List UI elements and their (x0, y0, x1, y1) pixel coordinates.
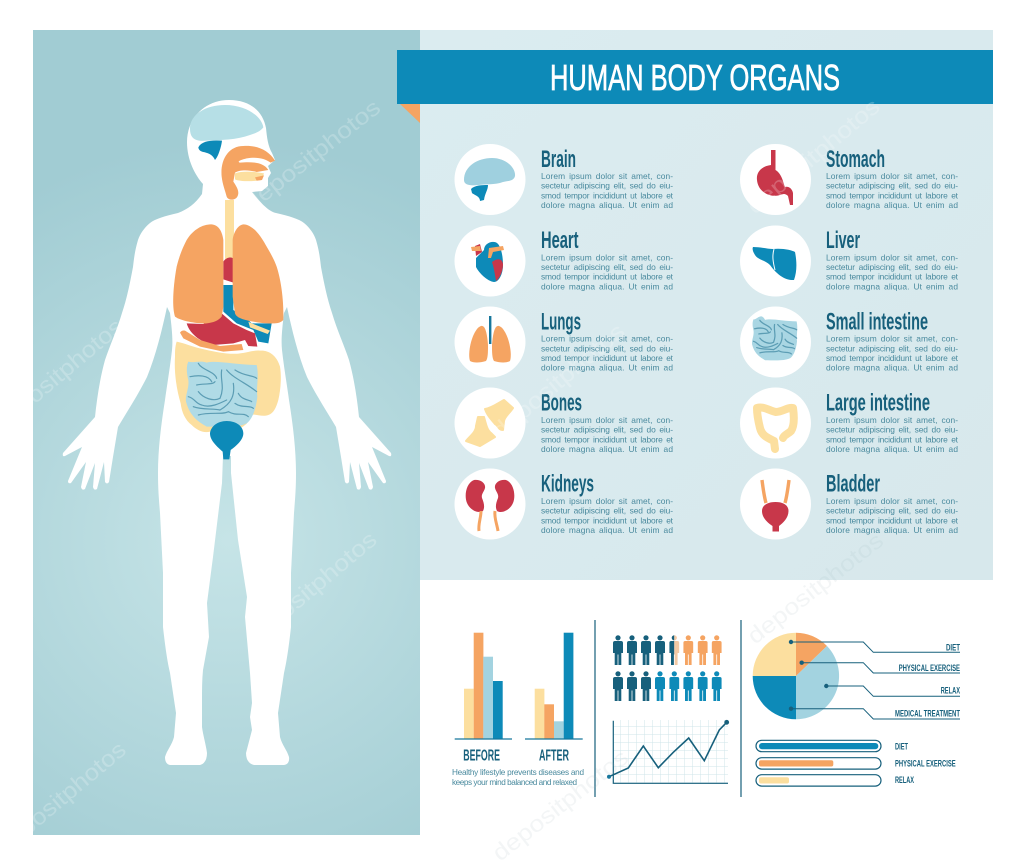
text: Liver description (826, 252, 959, 291)
text: Bladder description: sectetur adipiscing elit, sed do eiu- (826, 506, 958, 516)
pie leader: diet: DIET (946, 642, 960, 653)
text: Brain description (541, 171, 674, 210)
heading: Brain: Brain (541, 146, 576, 173)
text: Bones description: sectetur adipiscing elit, sed do eiu- (541, 425, 673, 435)
pie leader: physical exercise: PHYSICAL EXERCISE (899, 663, 960, 674)
text: Stomach description: smod tempor incididunt ut labore et (826, 190, 959, 200)
watermark (0, 93, 888, 865)
text: Stomach description (826, 171, 959, 210)
organ entry: brain (454, 144, 674, 215)
organ entry: liver (740, 226, 959, 296)
text: Liver description: sectetur adipiscing elit, sed do eiu- (826, 262, 958, 272)
text: Lungs description: sectetur adipiscing elit, sed do eiu- (541, 343, 673, 353)
text: Lungs description: Lorem ipsum dolor sit amet, con- (541, 334, 673, 344)
icon: bones (454, 388, 526, 458)
heading: Heart: Heart (541, 227, 579, 254)
caption (452, 768, 584, 787)
text: Brain description: Lorem ipsum dolor sit amet, con- (541, 171, 673, 181)
bladder (210, 421, 243, 459)
text: Liver description: dolore magna aliqua. Ut enim ad (826, 281, 958, 291)
heart and vessels blue (223, 285, 272, 343)
heading: Bladder: Bladder (826, 470, 880, 498)
text: Large intestine description (826, 415, 959, 454)
caption: Healthy lifestyle prevents diseases and (452, 768, 584, 777)
text: Kidneys description: sectetur adipiscing elit, sed do eiu- (541, 506, 673, 516)
trachea (225, 200, 234, 260)
watermark: depositphotos (239, 94, 385, 216)
mouth (235, 172, 264, 181)
label: after: AFTER (539, 748, 569, 764)
text: Liver description: Lorem ipsum dolor sit amet, con- (826, 252, 958, 262)
organ entry: lungs (454, 306, 674, 378)
nasal cavity and throat (221, 146, 275, 200)
brain (190, 105, 263, 141)
heading: Large intestine: Large intestine (826, 390, 930, 416)
background panel: body figure (33, 30, 420, 835)
text: Large intestine description: dolore magna aliqua. Ut enim ad (826, 444, 958, 454)
icon: large intestine (740, 388, 811, 458)
vessel stripe (248, 322, 270, 334)
heading: Bones: Bones (541, 390, 582, 416)
heading: Lungs: Lungs (541, 308, 581, 336)
people pictogram (613, 635, 722, 701)
cerebellum (198, 140, 222, 160)
text: Small intestine description: dolore magna aliqua. Ut enim ad (826, 363, 958, 373)
text: Stomach description: Lorem ipsum dolor sit amet, con- (826, 171, 958, 181)
text: Small intestine description (826, 334, 959, 373)
pancreas (180, 331, 243, 352)
icon: kidneys (454, 468, 526, 540)
human body figure (63, 100, 391, 765)
pie chart (753, 633, 839, 719)
watermark: depositphotos (487, 744, 633, 865)
text: Heart description (541, 252, 674, 291)
banner (397, 50, 993, 104)
left lung (173, 224, 223, 323)
label: before: BEFORE (463, 748, 500, 764)
large intestine (175, 342, 281, 432)
stomach (187, 313, 257, 347)
heading: Stomach: Stomach (826, 146, 885, 173)
pie leader: relax: RELAX (941, 686, 960, 697)
text: Heart description: dolore magna aliqua. Ut enim ad (541, 281, 673, 291)
right lung (233, 224, 283, 324)
text: Bones description: smod tempor incididunt ut labore et (541, 434, 674, 444)
text: Bladder description (826, 496, 959, 535)
upper body organs (173, 105, 283, 432)
watermark: depositphotos (239, 526, 382, 652)
text: Lungs description: dolore magna aliqua. Ut enim ad (541, 363, 673, 373)
icon: lungs (454, 306, 526, 378)
text: Bladder description: dolore magna aliqua. Ut enim ad (826, 525, 958, 535)
progress bar: diet: DIET (895, 741, 908, 752)
pie leader: medical treatment (789, 706, 960, 720)
organ entry: stomach (740, 144, 959, 215)
heading: Liver: Liver (826, 227, 860, 254)
text: Kidneys description: dolore magna aliqua. Ut enim ad (541, 525, 673, 535)
icon: bladder (740, 468, 811, 540)
progress bar: relax (756, 775, 914, 786)
text: Kidneys description: Lorem ipsum dolor sit amet, con- (541, 496, 673, 506)
text: Bones description (541, 415, 674, 454)
text: Large intestine description: Lorem ipsum dolor sit amet, con- (826, 415, 958, 425)
bar chart: before (455, 633, 512, 764)
text: Brain description: smod tempor incididunt ut labore et (541, 190, 674, 200)
title: HUMAN BODY ORGANS (550, 57, 840, 98)
text: Large intestine description: smod tempor incididunt ut labore et (826, 434, 959, 444)
text: Large intestine description: sectetur adipiscing elit, sed do eiu- (826, 425, 958, 435)
pie leader: physical exercise (800, 660, 960, 674)
text: Brain description: sectetur adipiscing elit, sed do eiu- (541, 181, 673, 191)
text: Stomach description: dolore magna aliqua. Ut enim ad (826, 200, 958, 210)
pie leader: medical treatment: MEDICAL TREATMENT (895, 709, 960, 720)
text: Heart description: smod tempor incididunt ut labore et (541, 272, 674, 282)
watermark: depositphotos (487, 318, 630, 444)
icon: small intestine (740, 306, 811, 378)
text: Bladder description: Lorem ipsum dolor sit amet, con- (826, 496, 958, 506)
text: Small intestine description: smod tempor incididunt ut labore et (826, 353, 959, 363)
pie leader: diet (789, 640, 960, 653)
text: Heart description: sectetur adipiscing elit, sed do eiu- (541, 262, 673, 272)
organ entry: bladder (740, 468, 959, 540)
progress bar: physical exercise (756, 758, 956, 770)
banner fold (400, 104, 420, 123)
heading: Small intestine: Small intestine (826, 308, 928, 336)
text: Bladder description: smod tempor incididunt ut labore et (826, 515, 959, 525)
organ entry: heart (454, 226, 674, 296)
text: Kidneys description: smod tempor incididunt ut labore et (541, 515, 674, 525)
pie leader: relax (824, 684, 960, 697)
watermark: depositphotos (742, 527, 888, 649)
icon: liver (740, 226, 811, 296)
small intestine (186, 362, 258, 427)
text: Small intestine description: sectetur adipiscing elit, sed do eiu- (826, 343, 958, 353)
tongue tip (255, 175, 264, 181)
text: Small intestine description: Lorem ipsum dolor sit amet, con- (826, 334, 958, 344)
line chart (607, 720, 729, 783)
organ entry: bones (454, 388, 674, 458)
text: Bones description: dolore magna aliqua. Ut enim ad (541, 444, 673, 454)
icon: stomach (740, 144, 811, 215)
progress bar: diet (756, 740, 908, 752)
background panel: organs list (420, 30, 993, 580)
watermark: depositphotos (742, 93, 885, 219)
body silhouette (63, 100, 391, 765)
progress bar: relax: RELAX (895, 775, 914, 786)
text: Lungs description: smod tempor incididunt ut labore et (541, 353, 674, 363)
heading: Kidneys: Kidneys (541, 470, 594, 498)
organ entry: small intestine (740, 306, 959, 378)
text: Stomach description: sectetur adipiscing elit, sed do eiu- (826, 181, 958, 191)
caption: keeps your mind balanced and relaxed (452, 778, 577, 787)
text: Lungs description (541, 334, 674, 373)
text: Brain description: dolore magna aliqua. Ut enim ad (541, 200, 673, 210)
organ entry: large intestine (740, 388, 959, 458)
organ entry: kidneys (454, 468, 674, 540)
text: Bones description: Lorem ipsum dolor sit amet, con- (541, 415, 673, 425)
text: Heart description: Lorem ipsum dolor sit amet, con- (541, 252, 673, 262)
heart red (223, 257, 233, 283)
text: Kidneys description (541, 496, 674, 535)
icon: heart (454, 226, 526, 296)
text: Liver description: smod tempor incididunt ut labore et (826, 272, 959, 282)
progress bar: physical exercise: PHYSICAL EXERCISE (895, 759, 956, 770)
bar chart: after (525, 633, 583, 764)
icon: brain (454, 144, 526, 215)
